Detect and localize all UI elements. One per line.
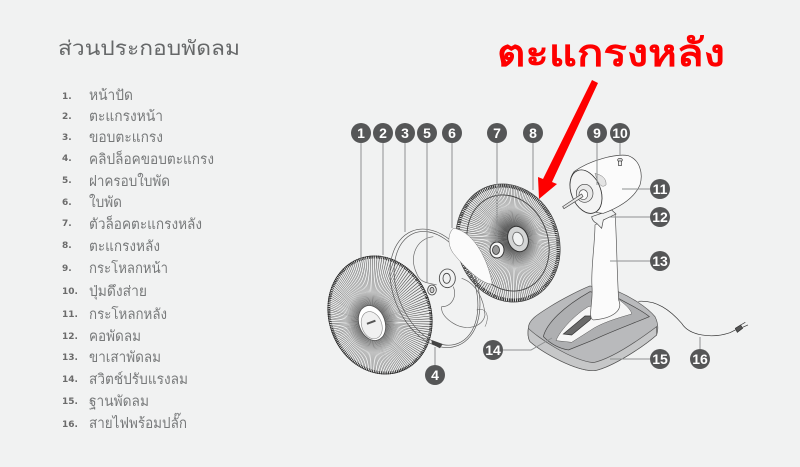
- parts list: 1.: [62, 92, 72, 102]
- number badges: 11: [653, 181, 668, 197]
- blade hub: [439, 269, 455, 288]
- parts list: 14.: [62, 375, 78, 385]
- motor housing: [563, 155, 641, 218]
- plug: [735, 322, 748, 332]
- rear grill: [456, 184, 560, 302]
- parts list: 16.: [62, 420, 78, 430]
- number badges: 2: [379, 125, 387, 141]
- parts list: ปุ่มดึงส่าย: [89, 284, 147, 300]
- parts list: 10.: [62, 287, 78, 297]
- parts list: 9.: [62, 264, 72, 274]
- number badges: 9: [593, 125, 601, 141]
- red heading: ตะแกรงหลัง: [497, 33, 725, 75]
- clip: [432, 340, 443, 348]
- parts list: คลิปล็อคขอบตะแกรง: [89, 149, 214, 168]
- rear grill lock: [490, 242, 504, 258]
- parts list: 12.: [62, 332, 78, 342]
- base: [528, 286, 658, 371]
- switches: [563, 316, 592, 335]
- parts list: 11.: [62, 310, 78, 320]
- number badges: 14: [485, 342, 501, 358]
- parts list: 4.: [62, 154, 72, 164]
- parts list: กระโหลกหลัง: [89, 305, 167, 323]
- parts list: ใบพัด: [89, 193, 122, 211]
- number badges: 4: [431, 367, 439, 383]
- parts list: คอพัดลม: [89, 329, 141, 345]
- parts list: 15.: [62, 397, 78, 407]
- leader lines: [361, 143, 700, 365]
- parts list: 5.: [62, 176, 72, 186]
- parts list: สวิตช์ปรับแรงลม: [89, 371, 188, 388]
- pull knob: [618, 158, 622, 166]
- parts list: ตะแกรงหลัง: [89, 239, 160, 255]
- parts list: 2.: [62, 112, 72, 122]
- front cap: [354, 302, 390, 344]
- parts list: ฐานพัดลม: [89, 394, 149, 410]
- front grill: [327, 256, 433, 374]
- parts list: 6.: [62, 198, 72, 208]
- number badges: 6: [448, 125, 456, 141]
- parts list: หน้าปัด: [89, 87, 133, 104]
- parts list: ตัวล็อคตะแกรงหลัง: [89, 214, 202, 233]
- number badges: 7: [493, 125, 501, 141]
- number badges: [351, 123, 710, 385]
- fan motor, stand and base: [528, 155, 748, 371]
- grill ring: [373, 216, 497, 361]
- parts list: ฝาครอบใบพัด: [89, 172, 170, 190]
- spinner nut: [428, 285, 436, 295]
- parts list: กระโหลกหน้า: [89, 259, 168, 277]
- red arrow: [538, 80, 598, 199]
- parts list: [62, 87, 214, 432]
- parts list: 7.: [62, 219, 72, 229]
- parts list: 3.: [62, 133, 72, 143]
- number badges: 16: [692, 351, 708, 367]
- fan blade: [413, 228, 492, 327]
- number badges: 3: [401, 125, 409, 141]
- number badges: 10: [612, 125, 628, 141]
- power cord: [638, 301, 737, 336]
- parts list: 8.: [62, 241, 72, 251]
- rear grill hub: [504, 223, 532, 255]
- title: ส่วนประกอบพัดลม: [58, 38, 240, 60]
- neck: [592, 210, 616, 228]
- number badges: 5: [423, 125, 431, 141]
- parts list: ตะแกรงหน้า: [89, 108, 163, 125]
- number badges: 15: [652, 351, 668, 367]
- number badges: 8: [529, 125, 537, 141]
- parts list: 13.: [62, 353, 78, 363]
- parts list: สายไฟพร้อมปลั๊ก: [89, 412, 187, 432]
- exploded parts: [373, 216, 497, 361]
- number badges: 1: [357, 125, 365, 141]
- parts list: ขอบตะแกรง: [89, 130, 163, 146]
- stand column: [591, 213, 620, 320]
- parts list: ขาเสาพัดลม: [89, 350, 161, 366]
- number badges: 13: [652, 253, 668, 269]
- number badges: 12: [652, 209, 668, 225]
